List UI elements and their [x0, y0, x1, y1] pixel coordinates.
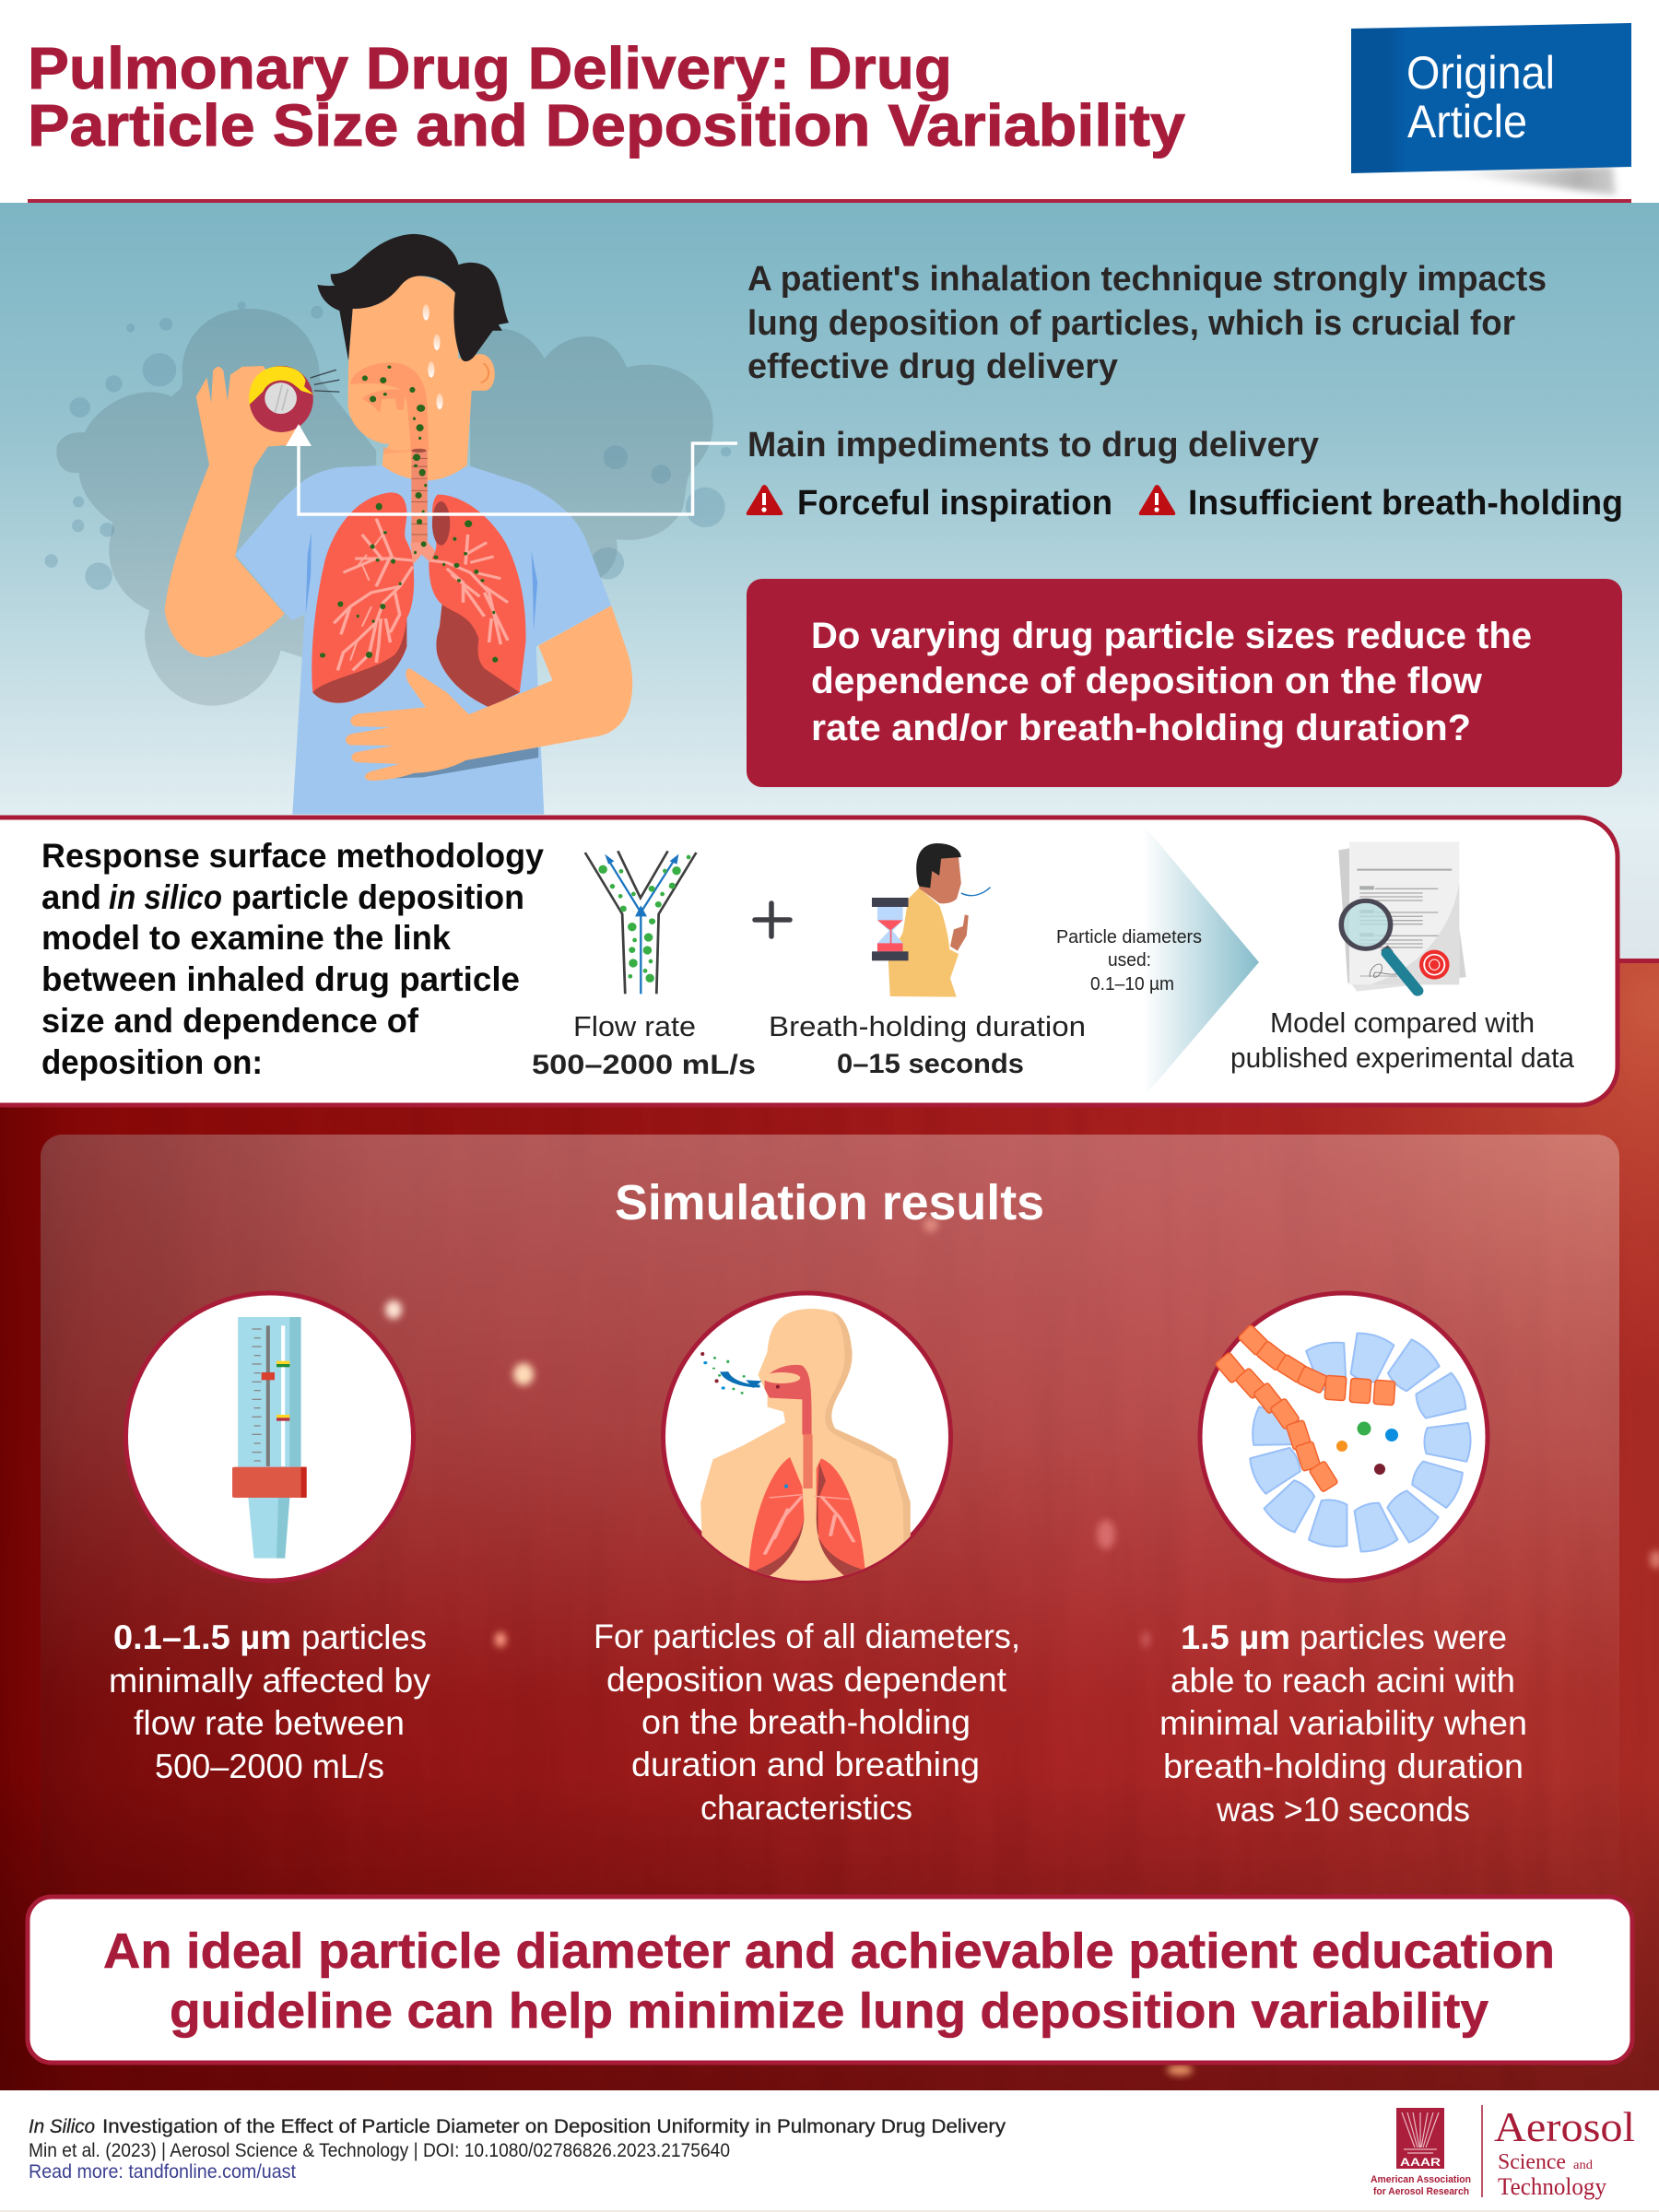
icon: warning triangle	[1139, 485, 1175, 515]
badge: original article: Article	[1407, 96, 1527, 147]
man: left lung	[312, 492, 414, 703]
logo: Aerosol Science and Technology: Aerosol	[1494, 2103, 1635, 2150]
result 2 text: on the breath-holding	[641, 1703, 971, 1741]
result 2: respiratory system circle	[664, 1293, 951, 1585]
result 2 text: characteristics	[700, 1789, 912, 1827]
man: ear line	[480, 363, 488, 382]
intro text: lung deposition of particles, which is crucial for	[747, 304, 1515, 343]
icon: flow meter	[232, 1317, 307, 1559]
man: inhaler	[249, 366, 313, 432]
illustration: smoke clouds	[44, 301, 731, 706]
logo: Aerosol Science and Technology: and	[1573, 2159, 1593, 2172]
result 3 text	[1159, 1618, 1527, 1829]
result 2 text: For particles of all diameters,	[594, 1618, 1020, 1655]
impediment: forceful inspiration: Forceful inspiration	[797, 484, 1112, 523]
man: t-shirt	[235, 465, 611, 815]
result 2 text: duration and breathing	[631, 1746, 980, 1783]
methods description: model to examine the link	[41, 919, 451, 957]
result 2 text: deposition was dependent	[606, 1661, 1007, 1699]
methods description: deposition on:	[41, 1043, 263, 1081]
result 3 text: minimal variability when	[1159, 1704, 1527, 1742]
result 3 text: 1.5 µm	[1181, 1618, 1290, 1656]
label: model comparison	[1230, 1006, 1575, 1074]
label: flow rate: Flow rate	[573, 1010, 696, 1042]
label: model comparison: Model compared with	[1270, 1006, 1535, 1039]
result 1 text: 500–2000 mL/s	[155, 1747, 384, 1785]
icon: warning triangle	[747, 485, 782, 515]
arrow: particle diameters: Particle diameters	[1056, 927, 1202, 947]
label: breath-holding duration: 0–15 seconds	[837, 1049, 1024, 1079]
result 3 text: particles were	[1300, 1618, 1507, 1656]
panel: research question	[747, 579, 1622, 787]
arrow: particle diameters	[1056, 822, 1259, 1100]
intro text: effective drug delivery	[747, 347, 1118, 386]
man: airway	[350, 362, 429, 545]
result 2 text	[594, 1618, 1020, 1827]
intro text: A patient's inhalation technique strongly impacts	[747, 260, 1547, 299]
result 1 text: flow rate between	[134, 1704, 405, 1742]
logo: AAAR: American Association	[1371, 2174, 1471, 2185]
man: spray lines	[311, 370, 339, 392]
result 1: flow meter circle	[125, 1293, 413, 1581]
label: breath-holding duration	[769, 1010, 1086, 1079]
methods description: in silico	[109, 878, 222, 916]
intro text	[747, 260, 1547, 386]
title: Particle Size and Deposition Variability	[28, 92, 1185, 159]
panel: research question: Do varying drug particle sizes reduce the	[811, 616, 1532, 656]
logo: Aerosol Science and Technology	[1494, 2103, 1635, 2200]
logo: AAAR: AAAR	[1400, 2156, 1441, 2169]
hero background	[0, 203, 1659, 960]
man: shirt folds	[306, 533, 537, 630]
logo: AAAR	[1371, 2108, 1471, 2197]
result 3 text: able to reach acini with	[1171, 1662, 1515, 1700]
man: particles	[320, 366, 498, 663]
icon: alveoli ring	[1215, 1324, 1471, 1555]
red background	[0, 959, 1659, 2092]
citation: Investigation of the Effect of Particle Diameter on Deposition Uniformity in Pulmonary Drug Delivery	[102, 2116, 1006, 2137]
result 3 text: was >10 seconds	[1216, 1791, 1470, 1829]
citation: In Silico	[29, 2116, 95, 2137]
panel: conclusion	[28, 1897, 1632, 2063]
man: bronchi	[410, 543, 435, 564]
logo divider	[1481, 2105, 1483, 2197]
methods description: between inhaled drug particle	[41, 960, 520, 998]
footer	[0, 2090, 1659, 2212]
bokeh lights	[385, 1218, 1659, 2076]
logo: Aerosol Science and Technology: Technology	[1498, 2173, 1606, 2200]
result 3: acini circle	[1200, 1293, 1488, 1581]
result 1 text	[109, 1618, 430, 1785]
heading: main impediments: Main impediments to drug delivery	[747, 426, 1319, 465]
impediment: insufficient breath-holding: Insufficient breath-holding	[1188, 484, 1623, 523]
badge: original article: Original	[1406, 47, 1555, 99]
result 3 text: breath-holding duration	[1163, 1747, 1524, 1785]
panel: research question: rate and/or breath-holding duration?	[811, 708, 1471, 748]
icon: plus sign	[755, 903, 790, 936]
result 1 text: minimally affected by	[109, 1662, 430, 1700]
man: hair	[317, 234, 509, 361]
result 1 text: 0.1–1.5 µm	[113, 1618, 291, 1656]
panel: conclusion: guideline can help minimize lung deposition variability	[170, 1983, 1488, 2039]
citation	[29, 2116, 1006, 2183]
icon: breath holding person	[872, 843, 990, 997]
man: arm shadow	[376, 747, 538, 779]
label: breath-holding duration: Breath-holding duration	[769, 1010, 1086, 1042]
result 1 text: particles	[301, 1618, 427, 1656]
icon: document with magnifier	[1338, 841, 1466, 992]
label: flow rate: 500–2000 mL/s	[532, 1050, 756, 1080]
icon: respiratory system	[700, 1309, 911, 1585]
man: right lung	[429, 495, 525, 707]
panel: research question: dependence of deposition on the flow	[811, 661, 1483, 701]
heading: simulation results: Simulation results	[615, 1175, 1044, 1230]
methods description	[41, 837, 544, 1081]
arrow: connector to inhaler	[286, 424, 737, 514]
label: model comparison: published experimental data	[1230, 1041, 1575, 1074]
arrow: particle diameters: 0.1–10 µm	[1090, 974, 1174, 994]
man: raised arm and hand	[165, 366, 301, 657]
methods description: particle deposition	[231, 878, 524, 916]
panel: simulation results	[41, 1135, 1659, 2076]
panel: conclusion: An ideal particle diameter and achievable patient education	[103, 1924, 1555, 1979]
title: Pulmonary Drug Delivery: Drug	[28, 35, 952, 101]
citation: Min et al. (2023) | Aerosol Science & Technology | DOI: 10.1080/02786826.2023.2175640	[29, 2140, 730, 2161]
icon: airway flow	[585, 851, 696, 994]
title	[28, 35, 1185, 159]
header rule	[28, 199, 1631, 204]
illustration: patient using inhaler	[165, 234, 632, 815]
logo: AAAR: for Aerosol Research	[1373, 2186, 1469, 2197]
man: head and neck	[348, 276, 495, 480]
methods description: size and dependence of	[41, 1002, 419, 1040]
man: lower arm and hand	[346, 606, 632, 781]
citation: Read more: tandfonline.com/uast	[29, 2161, 296, 2183]
methods description: Response surface methodology	[41, 837, 544, 875]
man: sweat drops	[423, 304, 443, 409]
badge: original article	[1351, 23, 1631, 195]
arrow: particle diameters: used:	[1108, 950, 1151, 971]
label: flow rate	[532, 1010, 756, 1080]
logo: Aerosol Science and Technology: Science	[1498, 2150, 1566, 2174]
panel: methods	[0, 818, 1618, 1105]
methods description: and	[41, 878, 101, 916]
